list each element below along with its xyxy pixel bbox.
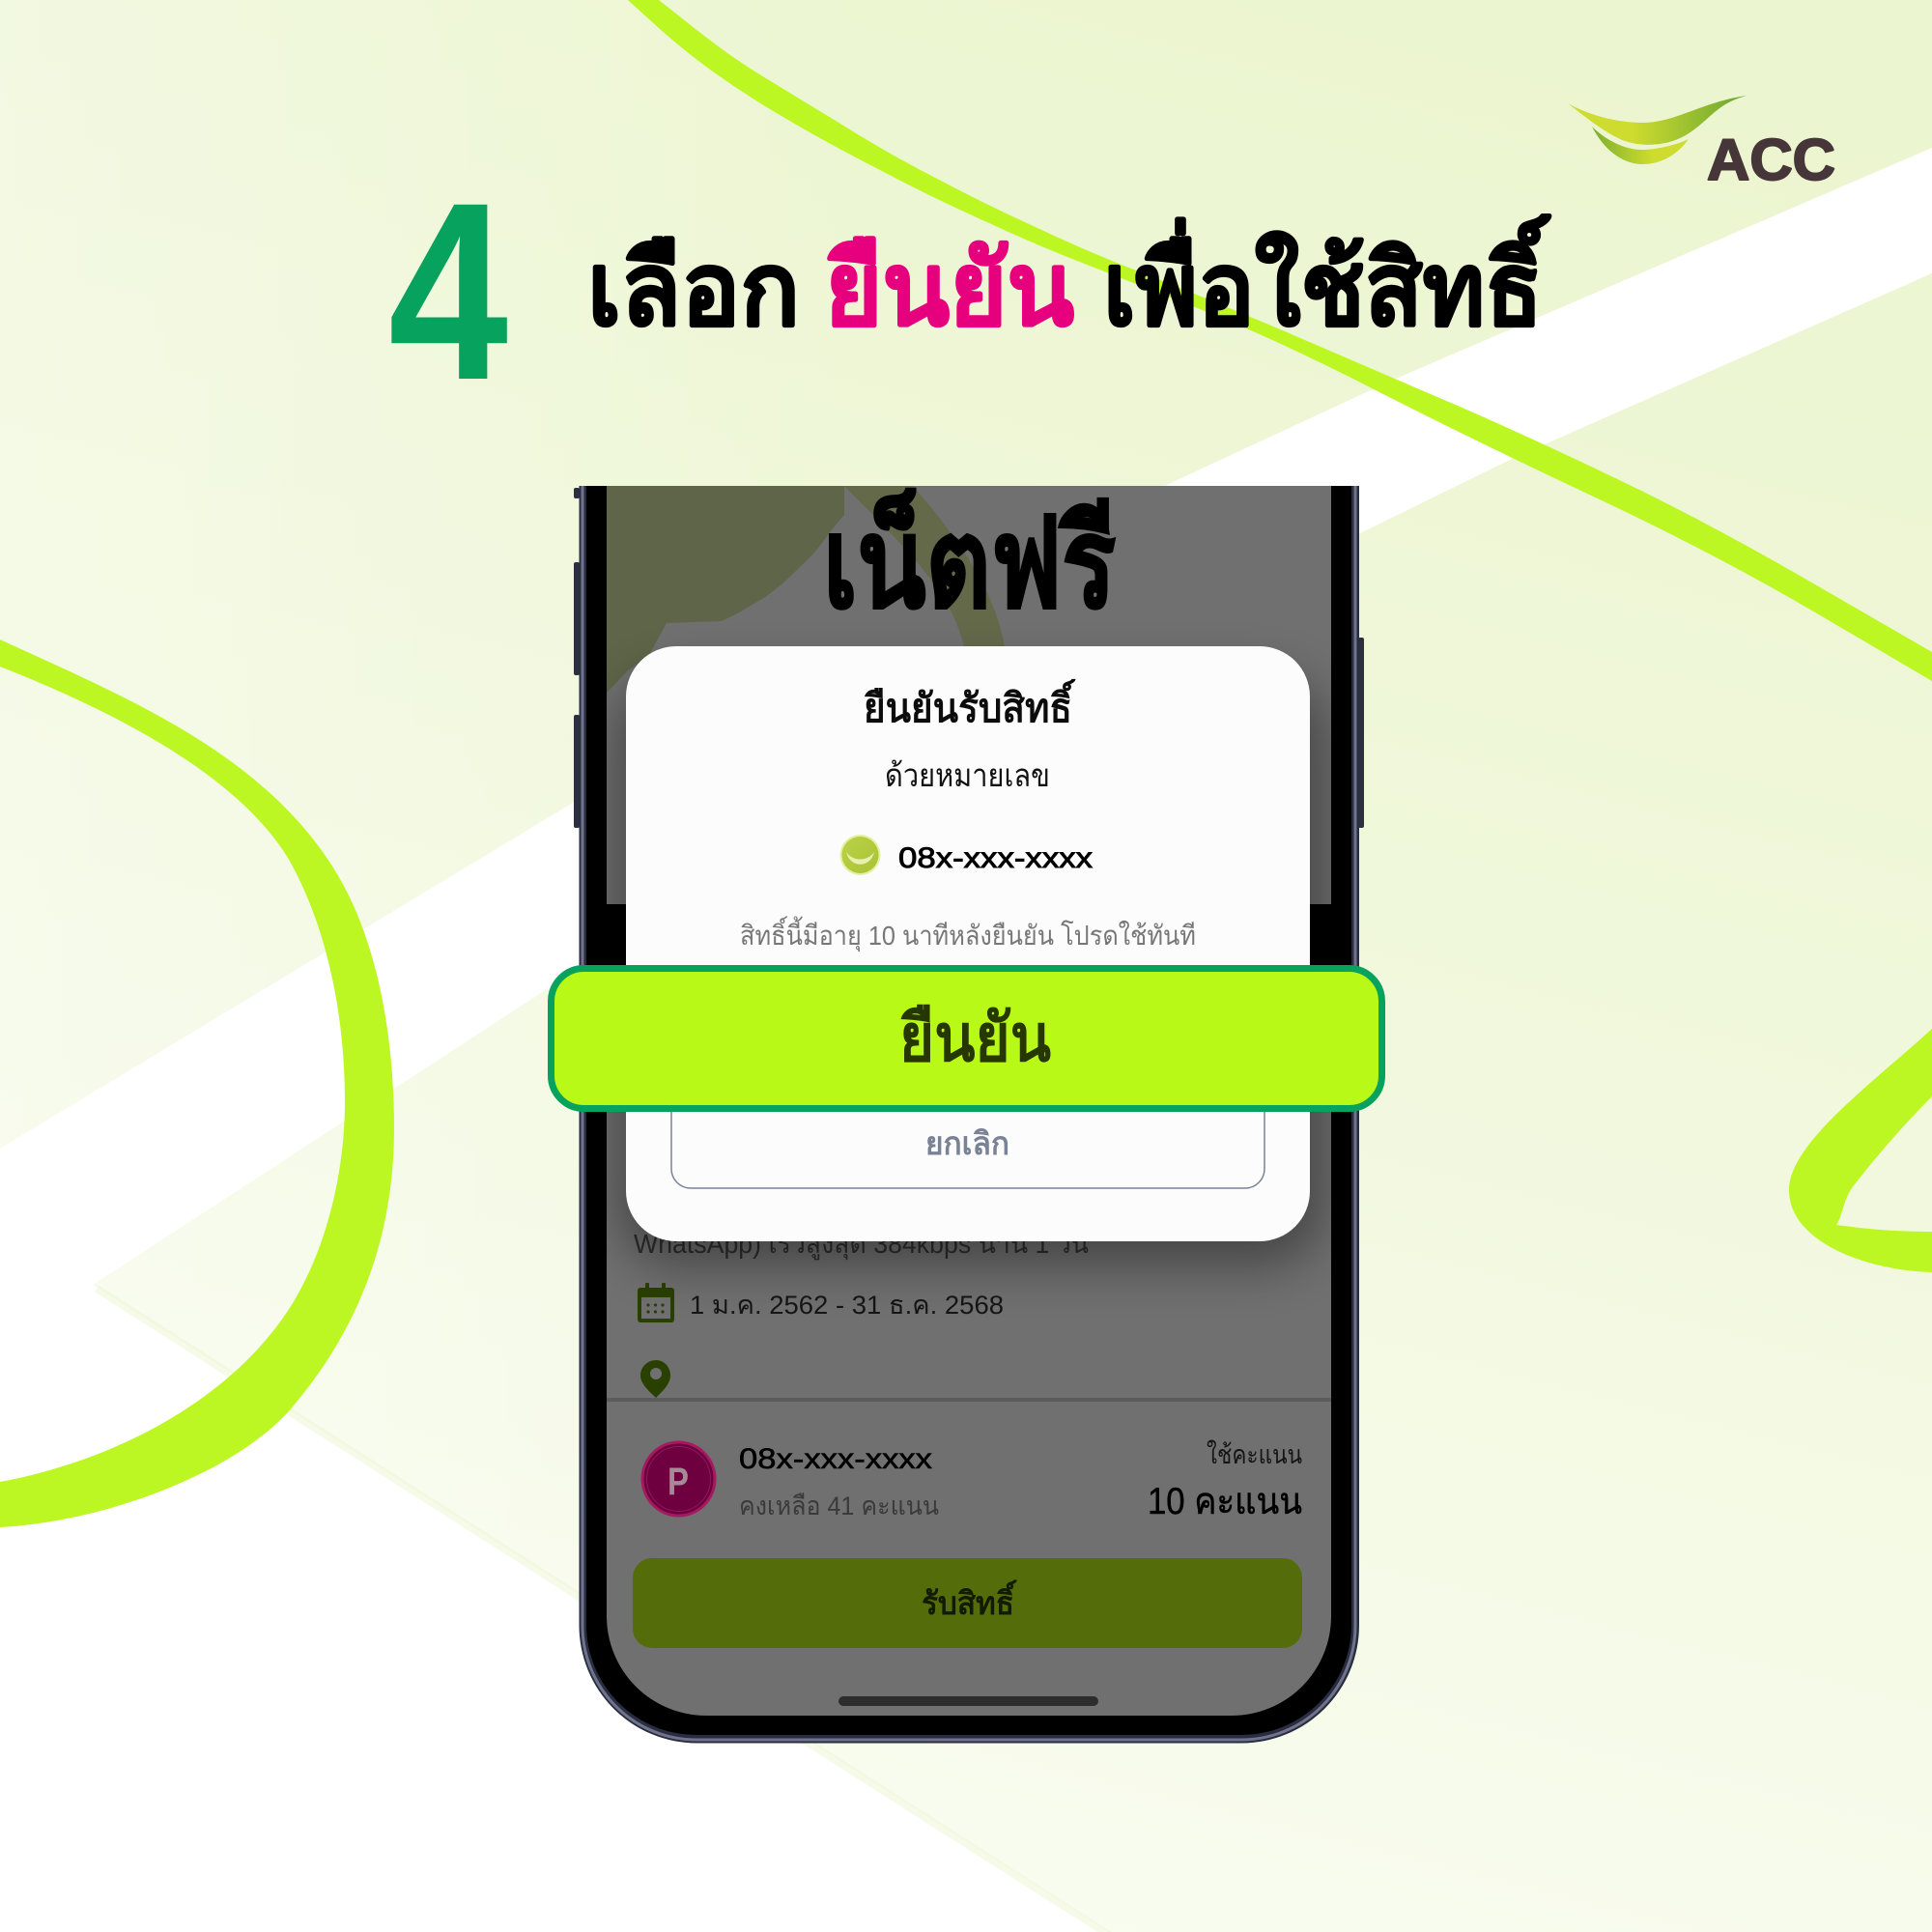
icon: points badge <box>642 1442 715 1516</box>
logo: ACC <box>1568 96 1835 192</box>
modal phone number: 08x-xxx-xxxx <box>898 842 1093 874</box>
modal shadow <box>618 676 1323 1265</box>
modal subtitle: ด้วยหมายเลข <box>885 757 1050 793</box>
title: เลือก <box>587 233 800 347</box>
points value: 10 คะแนน <box>1148 1481 1302 1522</box>
title <box>587 213 1551 347</box>
step number: 4 <box>388 150 509 433</box>
logo: ACC: ACC <box>1707 128 1835 192</box>
privilege description: WhatsApp) เร็วสูงสุด 384kbps นาน 1 วัน <box>634 1227 1089 1261</box>
screen heading: เน็ตฟรี <box>823 488 1116 634</box>
icon: points badge: P <box>668 1461 689 1503</box>
divider <box>607 1398 1331 1402</box>
screen banner shapes <box>607 486 1005 693</box>
modal title: ยืนยันรับสิทธิ์ <box>864 679 1076 730</box>
modal dialog <box>626 646 1310 1241</box>
decorative curve: right ribbon <box>1789 1029 1932 1272</box>
validity note: สิทธิ์นี้มีอายุ 10 นาทีหลังยืนยัน โปรดใช้ทันที <box>740 916 1196 952</box>
title: ยืนยัน <box>825 233 1074 347</box>
icon: calendar <box>638 1283 674 1322</box>
icon: location pin <box>640 1360 670 1398</box>
confirm button highlight: ยืนยัน <box>899 1002 1051 1075</box>
claim button <box>633 1558 1302 1648</box>
phone side buttons <box>574 488 1364 828</box>
home indicator <box>838 1696 1098 1706</box>
phone bezel <box>586 486 1351 1735</box>
phone body <box>579 486 1359 1743</box>
icon: user avatar <box>840 835 881 875</box>
phone metal highlight <box>582 486 1355 1740</box>
decorative curve: left ribbon <box>0 639 394 1527</box>
remaining points: คงเหลือ 41 คะแนน <box>739 1492 939 1520</box>
claim button: รับสิทธิ์ <box>922 1579 1018 1621</box>
phone <box>574 486 1364 1743</box>
validity dates: 1 ม.ค. 2562 - 31 ธ.ค. 2568 <box>690 1291 1004 1320</box>
points label: ใช้คะแนน <box>1207 1439 1302 1469</box>
title: เพื่อใช้สิทธิ์ <box>1103 213 1551 347</box>
phone number: 08x-xxx-xxxx <box>739 1443 932 1475</box>
decorative curve: top ribbon <box>628 0 1932 681</box>
confirm button highlight <box>551 968 1381 1109</box>
screen <box>607 486 1331 1719</box>
cancel button: ยกเลิก <box>925 1125 1009 1161</box>
cancel button <box>671 1082 1264 1188</box>
